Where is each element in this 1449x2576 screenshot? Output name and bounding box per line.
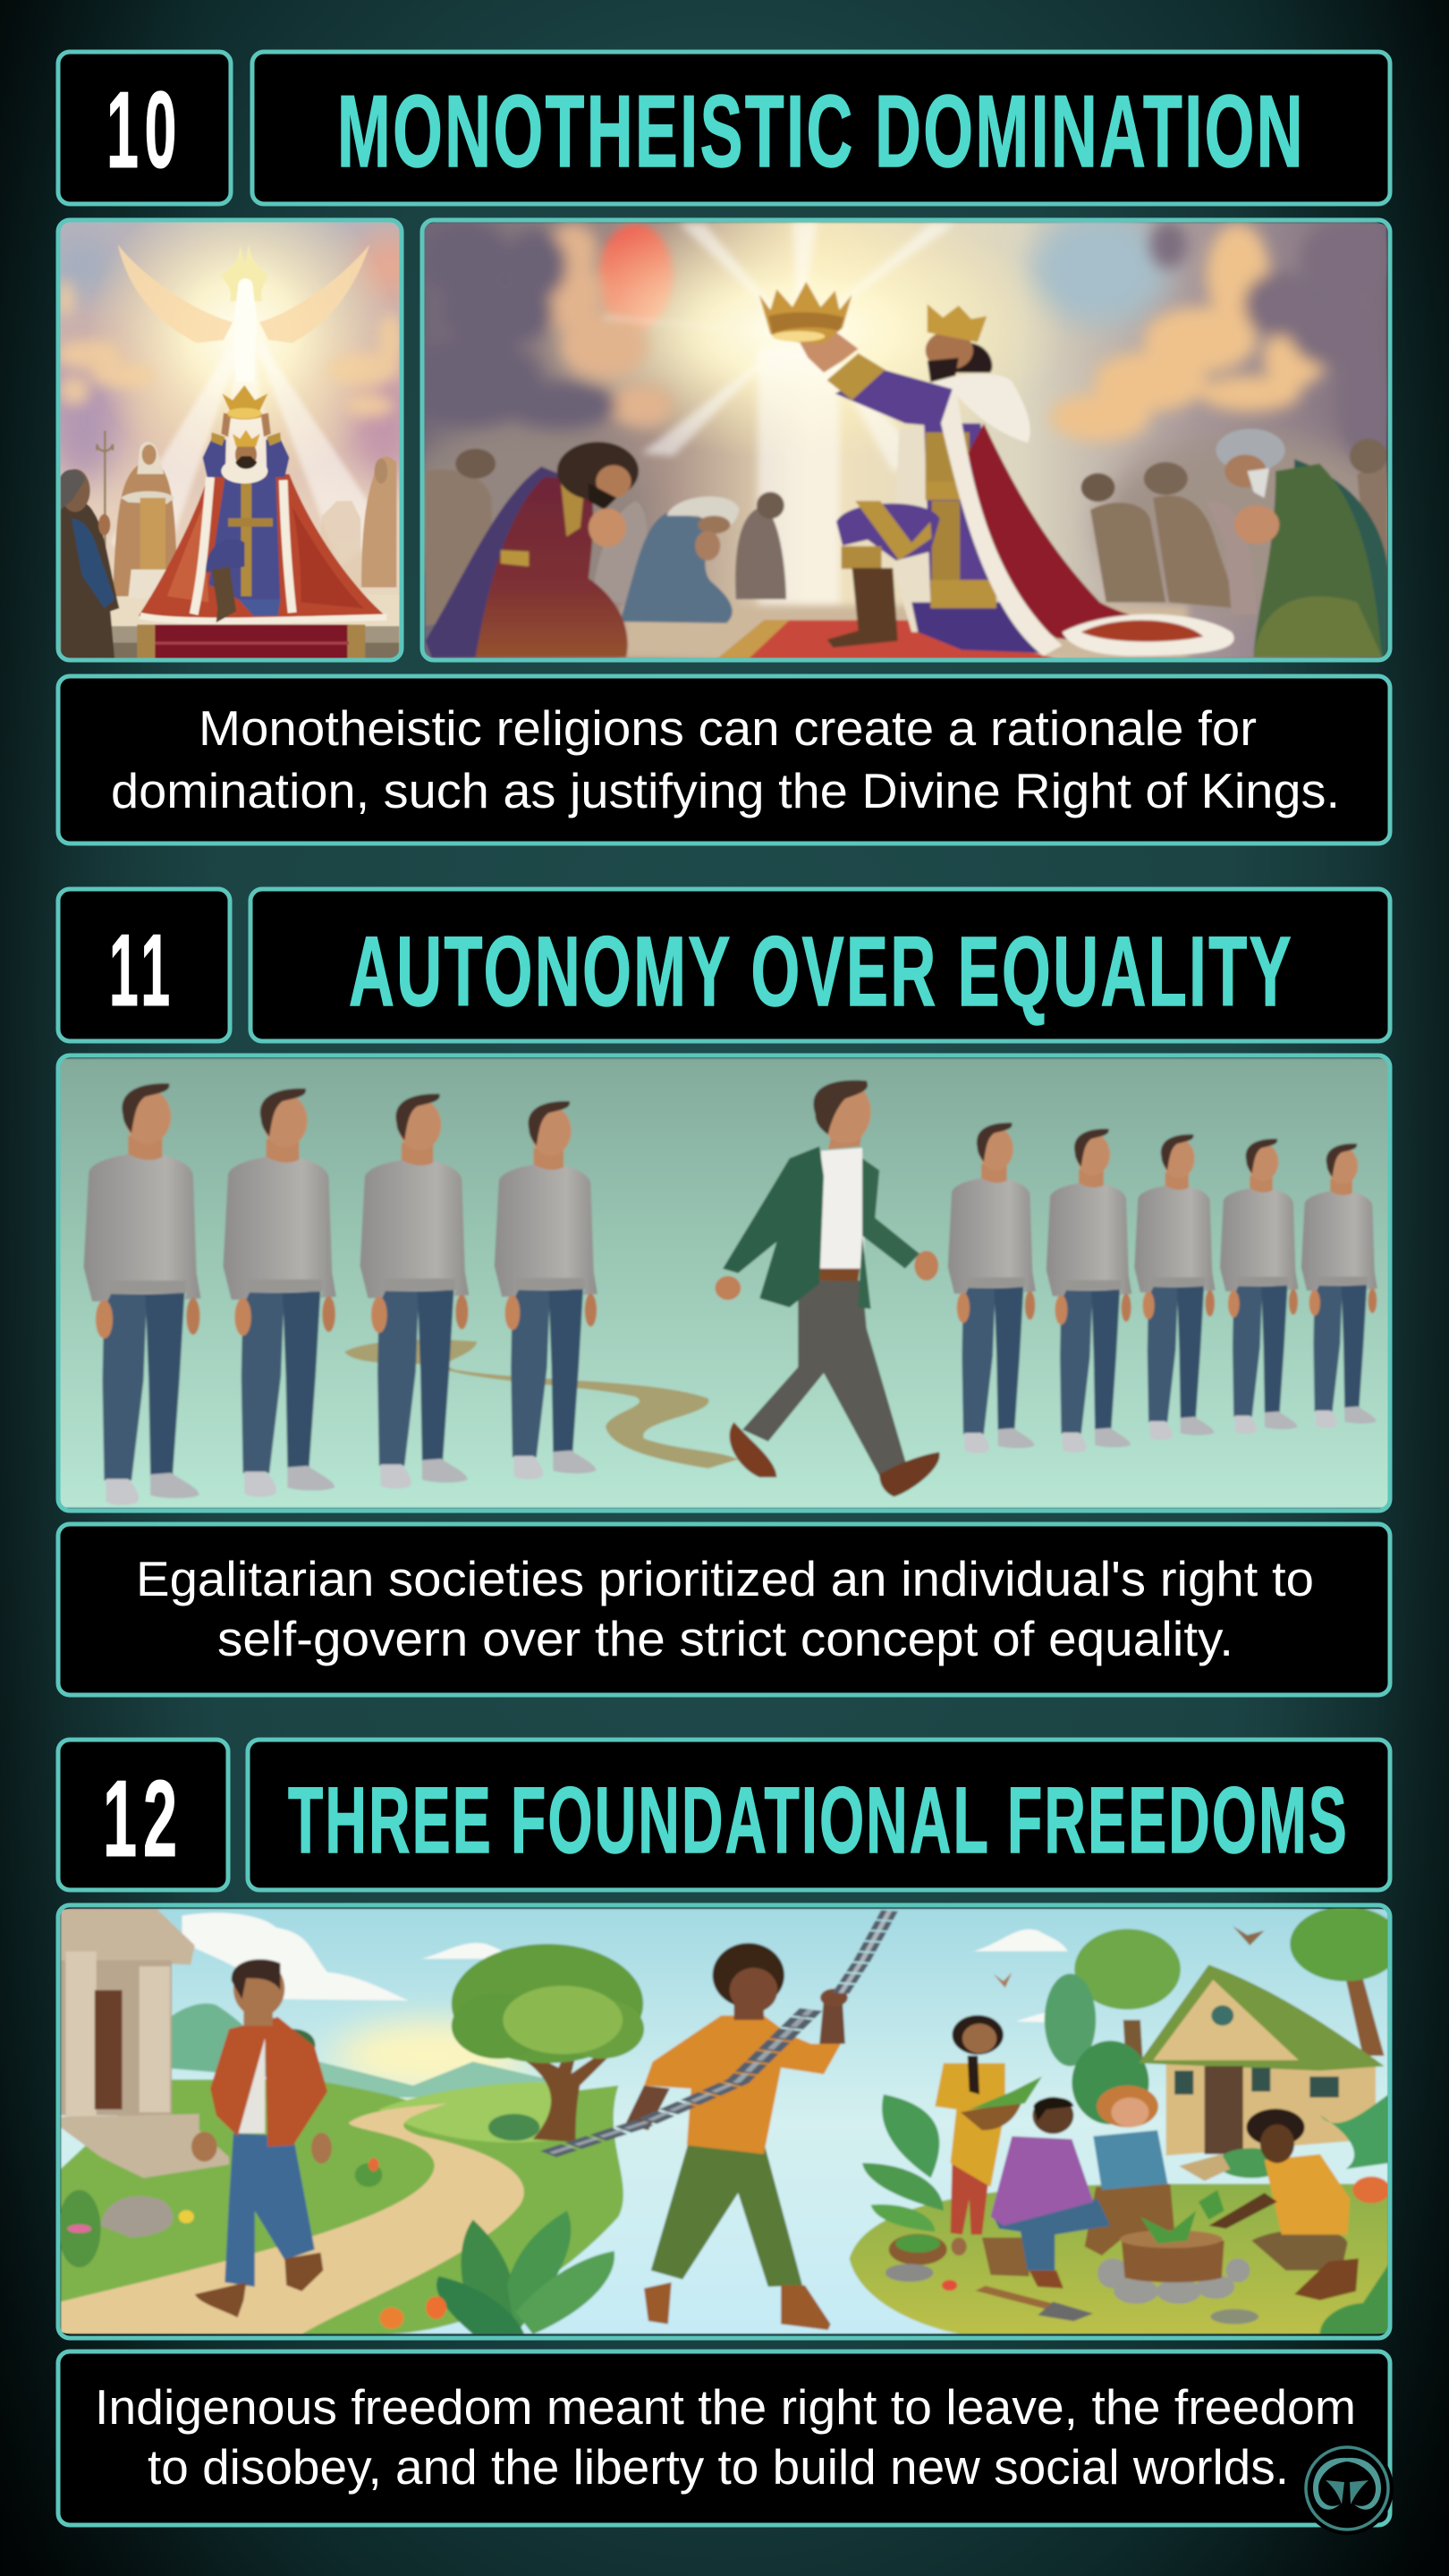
priest xyxy=(113,442,177,597)
old man in green praying xyxy=(1216,428,1388,657)
meadow and hill xyxy=(61,2080,623,2334)
caption 12: Indigenous freedom meant the right to leave, the freedom xyxy=(95,2379,1356,2435)
walking man with backpack xyxy=(191,1959,332,2318)
man in yellow xyxy=(1208,2109,1359,2301)
distant hills xyxy=(161,2004,550,2097)
temple xyxy=(61,1909,229,2178)
heading: autonomy over equality xyxy=(250,889,1390,1041)
number box 11: 11 xyxy=(109,914,175,1028)
woman breaking chain xyxy=(625,1943,848,2330)
caption 10: Monotheistic religions can create a rationale for xyxy=(199,700,1257,756)
frames of illustrations xyxy=(58,220,1390,660)
winding footpath xyxy=(61,2104,524,2334)
tropical foliage xyxy=(862,2095,1390,2232)
standing men, right group xyxy=(948,1123,1377,1453)
walking man in green jacket xyxy=(715,1080,940,1496)
shovel, basket, rock xyxy=(886,2234,1258,2324)
clouds xyxy=(182,1912,1072,2023)
number box 11 xyxy=(58,889,230,1041)
panel: section 12 three foundational freedoms xyxy=(58,1740,1402,2525)
number box 12: 12 xyxy=(103,1758,183,1879)
foreground plant xyxy=(379,2211,614,2334)
winding dirt path xyxy=(344,1340,738,1469)
illustration: one man walks away from identical line xyxy=(59,1058,1390,1508)
frame of illustration xyxy=(58,1055,1390,1511)
man in purple xyxy=(982,2097,1110,2288)
number box 10 xyxy=(58,52,231,204)
onlooker in blue xyxy=(60,469,119,661)
caption 10 xyxy=(58,676,1390,843)
broken chain xyxy=(548,1909,891,2154)
king with raised crown xyxy=(139,386,387,623)
background worshippers xyxy=(426,439,1387,626)
clouds right xyxy=(1050,221,1388,459)
standing men, left group xyxy=(83,1083,597,1505)
frame of illustration xyxy=(58,1905,1390,2338)
illustration: king kneeling with worshippers xyxy=(397,203,1413,659)
community island xyxy=(850,2184,1388,2334)
right trees and birds xyxy=(993,1907,1402,2124)
golden crown held aloft xyxy=(759,282,852,343)
planter stump and rocks xyxy=(1097,2190,1250,2304)
radiating light rays xyxy=(604,222,955,617)
man in maroon praying xyxy=(426,442,639,657)
distant figures xyxy=(316,456,396,597)
number box 10: 10 xyxy=(106,69,182,191)
cottage xyxy=(1139,1965,1385,2181)
dais and carpet xyxy=(111,623,399,658)
woman with basket xyxy=(935,2015,1042,2256)
icon: circular watermark logo xyxy=(1301,2442,1394,2535)
bottom right foliage xyxy=(1320,2265,1388,2334)
central tree xyxy=(452,1944,644,2142)
caption 11: self-govern over the strict concept of equality. xyxy=(217,1611,1233,1666)
winged figure xyxy=(118,244,369,382)
divine light rays xyxy=(111,345,368,551)
clouds left xyxy=(403,221,674,429)
woman in blue xyxy=(1085,2086,1174,2256)
caption 10: domination, such as justifying the Divine Right of Kings. xyxy=(111,763,1340,818)
staff xyxy=(97,431,113,572)
woman in blue praying xyxy=(620,496,739,623)
caption 11: Egalitarian societies prioritized an individual's right to xyxy=(136,1551,1314,1606)
caption 11 xyxy=(58,1524,1390,1695)
caption 12: to disobey, and the liberty to build new social worlds. xyxy=(148,2439,1289,2495)
heading: three foundational freedoms xyxy=(248,1740,1390,1890)
panel: section 11 autonomy over equality xyxy=(58,889,1390,1695)
illustration: king crowned by divine light xyxy=(61,222,399,658)
number box 12 xyxy=(58,1740,228,1890)
left foliage and rock xyxy=(58,2158,382,2267)
heading: monotheistic domination xyxy=(252,52,1390,204)
panel: section 10 monotheistic domination xyxy=(45,52,1413,843)
floor xyxy=(623,606,1188,659)
illustration: leave, disobey, build xyxy=(58,1907,1402,2334)
kneeling king xyxy=(759,282,1234,656)
caption 12 xyxy=(58,2351,1390,2525)
